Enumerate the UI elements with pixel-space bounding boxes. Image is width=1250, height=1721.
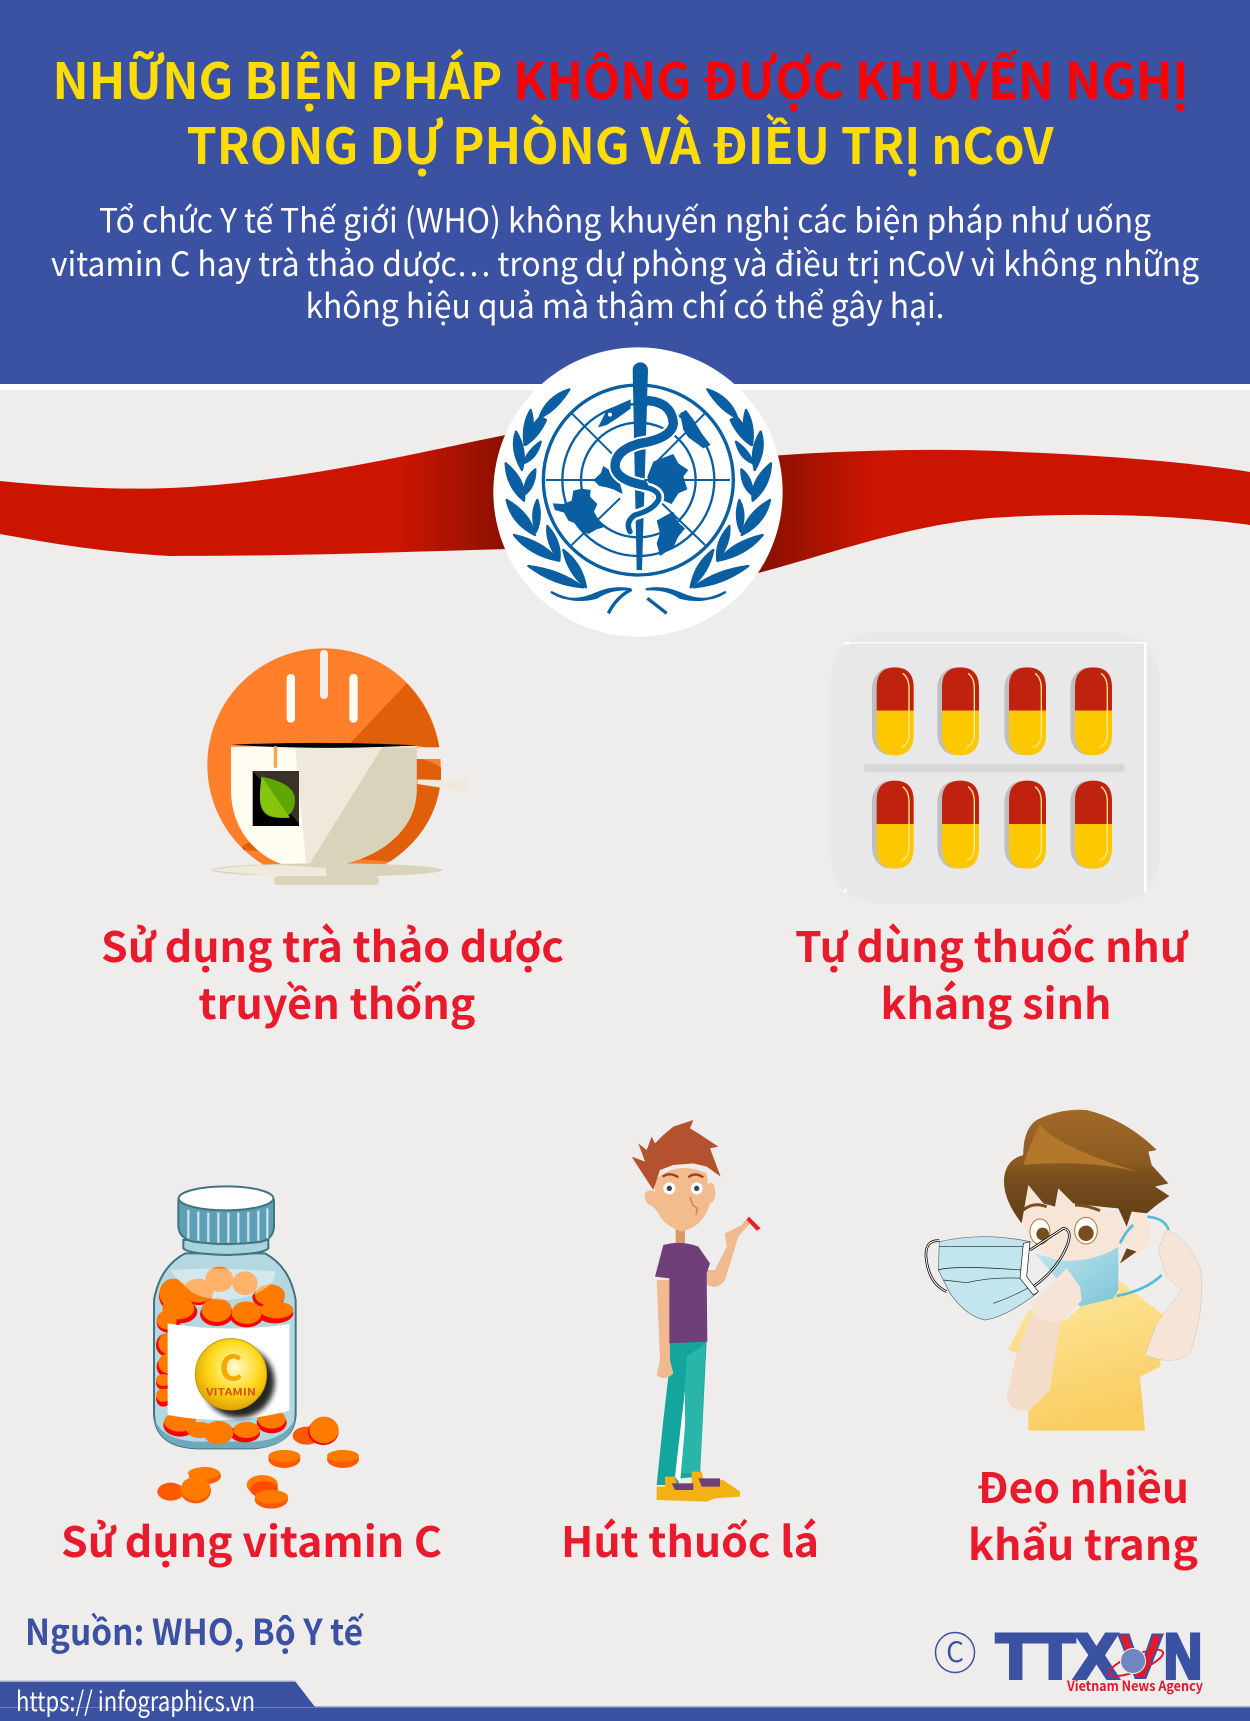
icon: WHO emblem [493, 347, 783, 637]
intro text: Tổ chức Y tế Thế giới (WHO) không khuyến nghị các biện pháp như uống [99, 194, 1151, 242]
vitamin label text [205, 1341, 256, 1399]
intro text: vitamin C hay trà thảo dược… trong dự phòng và điều trị nCoV vì không những [51, 237, 1199, 286]
icon: antibiotic blister pack [832, 632, 1159, 903]
icon: scattered pills [157, 1417, 359, 1509]
footer bar [0, 1680, 1250, 1721]
header panel [0, 0, 1250, 390]
TTXVN logo: TTX [996, 1622, 1118, 1692]
copyright mark [936, 1631, 974, 1672]
title [52, 42, 1188, 179]
caption: vitamin C: Sử dụng vitamin C [61, 1509, 442, 1570]
icon: tea bag leaf [253, 771, 299, 826]
icon: herbal tea cup [207, 648, 467, 885]
caption: wearing multiple masks: Đeo nhiều [977, 1455, 1189, 1516]
icon: man smoking [632, 1120, 761, 1502]
caption: wearing multiple masks: khẩu trang [968, 1512, 1198, 1573]
source: Nguồn: WHO, Bộ Y tế [25, 1604, 364, 1656]
TTXVN logo [996, 1622, 1203, 1696]
title: NHỮNG BIỆN PHÁP KHÔNG ĐƯỢC KHUYẾN NGHỊ [52, 42, 1188, 114]
icon: boy with face mask [926, 1110, 1202, 1431]
TTXVN logo: N [1164, 1622, 1202, 1692]
caption: antibiotics: Tự dùng thuốc như [795, 914, 1189, 975]
caption: herbal tea: truyền thống [198, 971, 476, 1032]
intro text [51, 194, 1199, 328]
caption: antibiotics [795, 914, 1189, 1032]
intro text: không hiệu quả mà thậm chí có thể gây hại. [306, 279, 944, 328]
title: TRONG DỰ PHÒNG VÀ ĐIỀU TRỊ nCoV [186, 107, 1055, 179]
vitamin label text: VITAMIN [205, 1384, 256, 1399]
caption: wearing multiple masks [968, 1455, 1198, 1573]
copyright mark: C [946, 1631, 964, 1671]
icon: pills inside bottle [156, 1267, 293, 1444]
icon: vitamin C bottle [154, 1186, 359, 1509]
red ribbon [0, 434, 1250, 575]
vitamin label text: C [220, 1341, 242, 1392]
icon: continents [553, 410, 711, 556]
caption: herbal tea: Sử dụng trà thảo dược [101, 914, 564, 975]
caption: smoking: Hút thuốc lá [561, 1509, 819, 1570]
caption: herbal tea [101, 914, 564, 1032]
caption: antibiotics: kháng sinh [880, 971, 1112, 1032]
TTXVN logo: Vietnam News Agency [1066, 1676, 1203, 1696]
footer url: https:// infographics.vn [16, 1680, 255, 1719]
TTXVN logo: V [1118, 1622, 1163, 1692]
